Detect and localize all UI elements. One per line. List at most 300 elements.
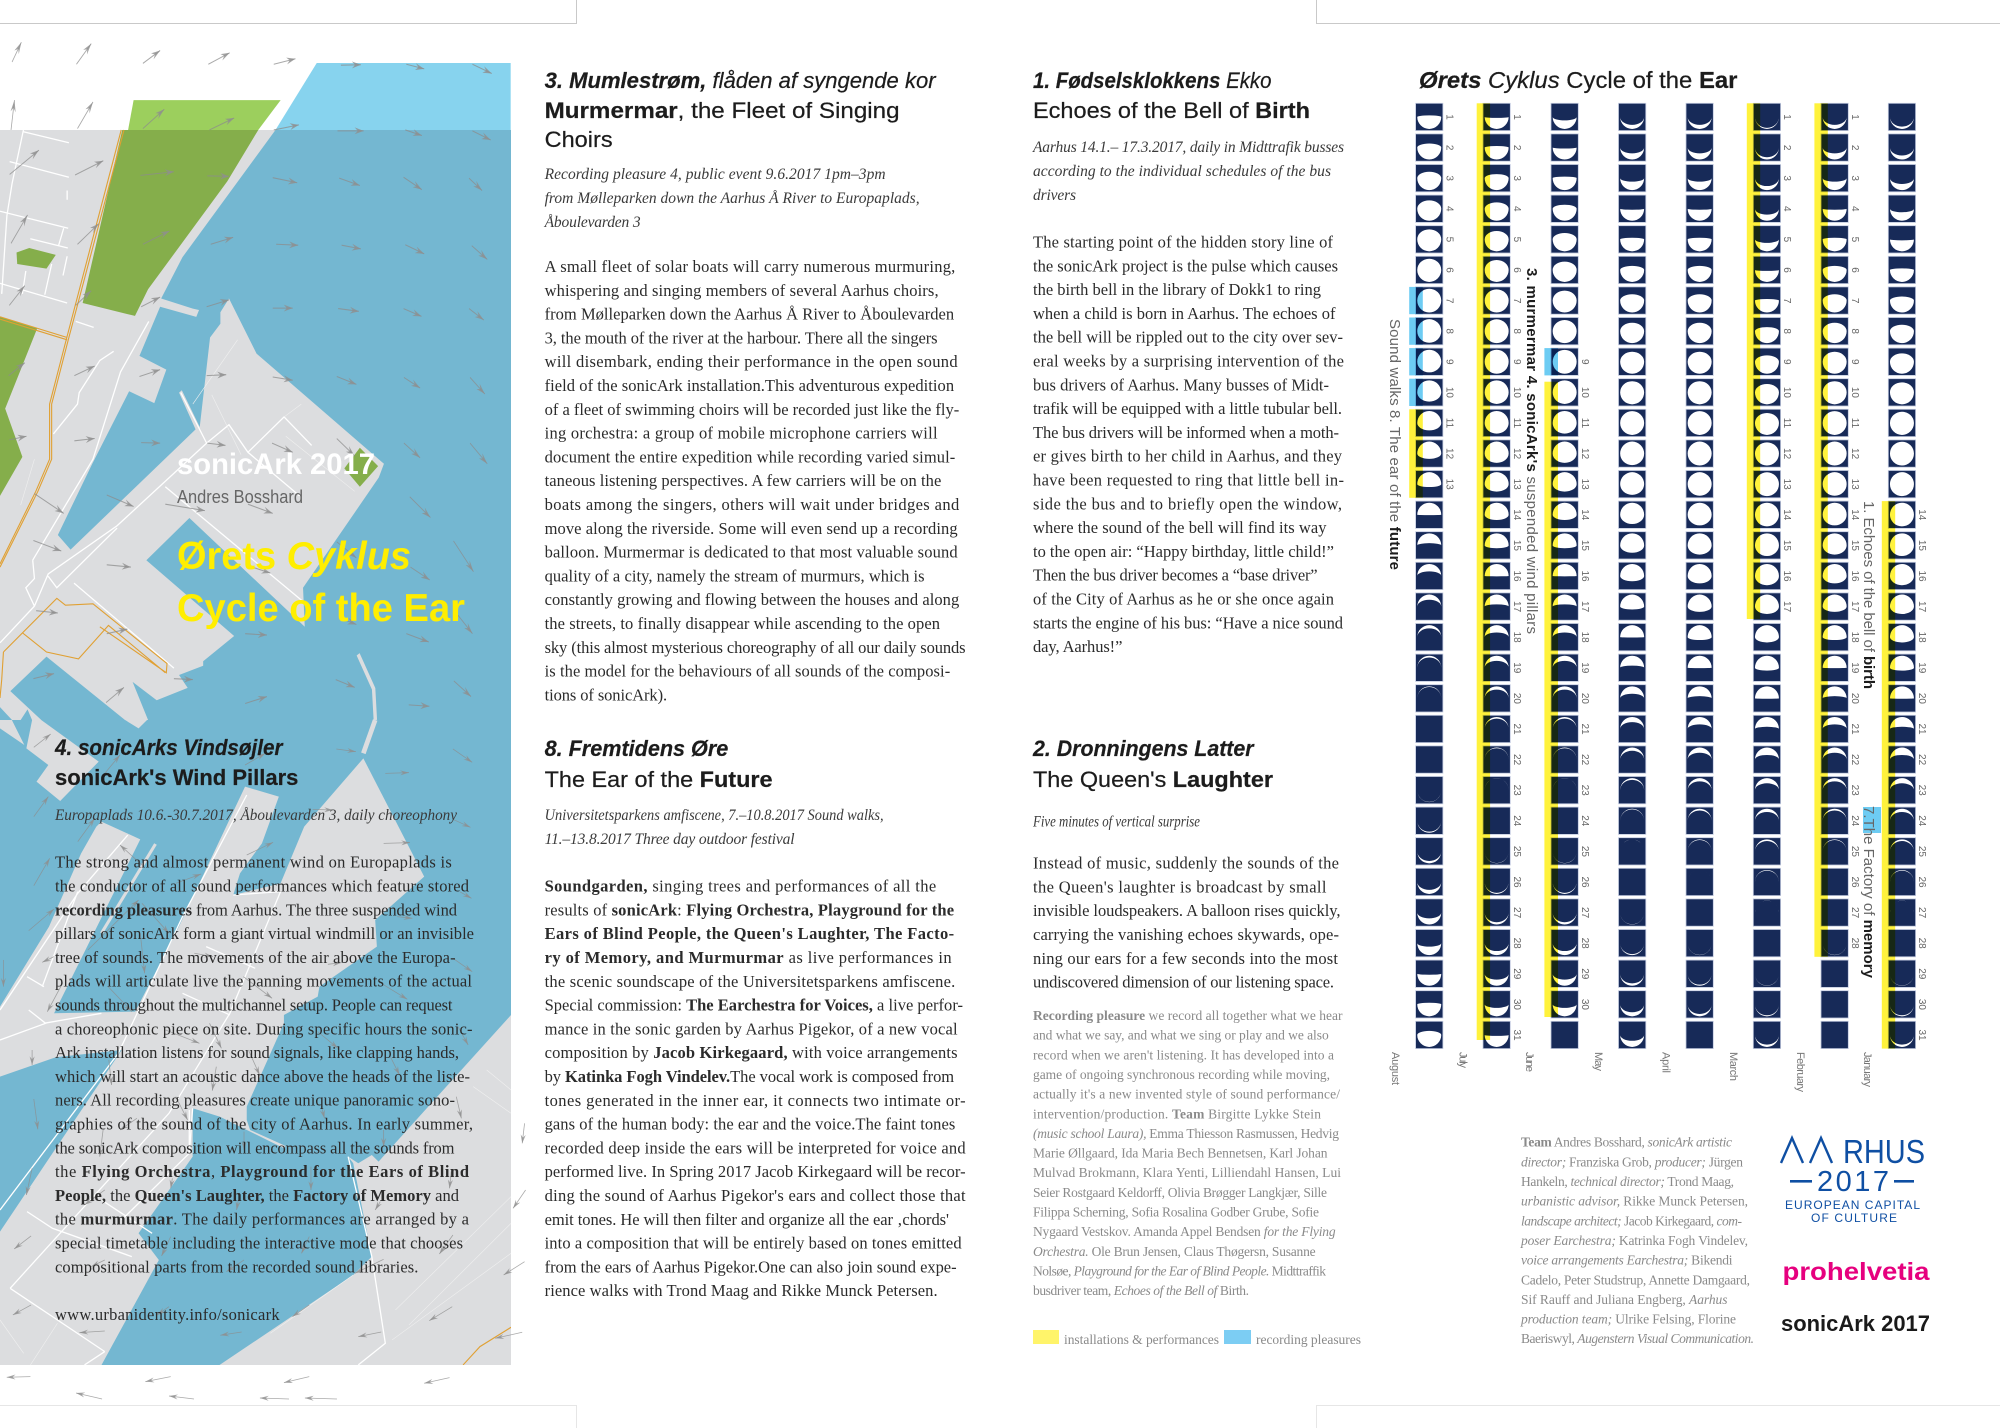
day numbers: January: 19	[1916, 662, 1927, 674]
body text: emit tones. He will then filter and organize all the ear ‚chords'	[545, 1210, 949, 1229]
dates: Recording pleasure 4, public event 9.6.2017 1pm–3pm	[544, 166, 886, 183]
body text: www.urbanidentity.info/sonicark	[55, 1305, 280, 1324]
heading: sonicArk's Wind Pillars	[54, 735, 298, 790]
day numbers: July: 11	[1511, 418, 1522, 429]
body text: ners. All recording pleasures create unique panoramic sono-	[55, 1091, 455, 1110]
day numbers: March	[1781, 114, 1792, 613]
month labels: February	[1794, 1052, 1806, 1092]
day numbers: January: 17	[1916, 601, 1927, 613]
day numbers: July: 6	[1511, 267, 1522, 273]
day numbers: February: 25	[1849, 846, 1860, 857]
dates: Aarhus 14.1.– 17.3.2017, daily in Midttrafik busses	[1032, 139, 1344, 156]
body text: recording pleasures from Aarhus. The three suspended wind	[55, 900, 458, 919]
text block: team credits	[1520, 1135, 1754, 1346]
day numbers: July: 16	[1511, 570, 1522, 582]
day numbers: July: 21	[1511, 723, 1522, 735]
legend label: recording: recording pleasures	[1256, 1332, 1361, 1347]
body text: ning our ears for a few seconds into the most	[1033, 949, 1338, 968]
panel: harbour map	[0, 42, 526, 1399]
day numbers: January: 16	[1916, 570, 1927, 582]
day numbers: July: 4	[1511, 206, 1522, 212]
subtitle: Five minutes of vertical surprise	[1032, 814, 1200, 830]
body text: into a composition that will be entirely based on tones emitted	[545, 1234, 962, 1253]
day numbers: August: 13	[1443, 479, 1454, 490]
text block: team credits: urbanistic advisor, Rikke Munck Petersen,	[1521, 1194, 1748, 1209]
dates	[1032, 139, 1344, 204]
body text: ing orchestra: a group of mobile microphone carriers will	[545, 424, 938, 443]
body text: a choreophonic piece on site. During specific hours the sonic-	[55, 1019, 472, 1038]
day numbers: February: 8	[1849, 328, 1860, 334]
text block: recording pleasure: busdriver team, Echoes of the Bell of Birth.	[1033, 1283, 1249, 1298]
body text: People, the Queen's Laughter, the Factory of Memory and	[55, 1186, 460, 1205]
logo: Aarhus 2017: EUROPEAN CAPITAL	[1785, 1198, 1920, 1212]
text block: recording pleasure: actually it's a new invented style of sound performance/	[1033, 1087, 1340, 1102]
body text: undiscovered dimension of our listening space.	[1033, 973, 1334, 992]
text block: recording pleasure: Filippa Scherning, Sofia Rosalina Godber Grube, Sofie	[1033, 1204, 1319, 1220]
day numbers: February: 14	[1849, 509, 1860, 521]
body text: have been requested to ring that little bell in-	[1033, 470, 1344, 490]
day numbers: February: 12	[1849, 448, 1860, 460]
heading: 8. Fremtidens Øre	[545, 736, 728, 761]
day numbers: February: 24	[1849, 815, 1860, 827]
body text: ry of Memory, and Murmurmar as live performances in	[545, 948, 952, 967]
body text	[545, 877, 966, 1300]
text block: team credits: landscape architect; Jacob Kirkegaard, com-	[1521, 1213, 1742, 1228]
day numbers: February: 4	[1849, 206, 1860, 212]
day numbers: February: 13	[1849, 479, 1860, 490]
panel: section 8 Ear of the Future	[545, 736, 966, 1300]
body text: the Flying Orchestra, Playground for the Ears of Blind	[55, 1162, 469, 1181]
body text: starts the engine of his bus: “Have a nice sound	[1033, 613, 1344, 632]
text block: recording pleasure: Recording pleasure we record all together what we hear	[1033, 1008, 1343, 1023]
day numbers: March: 2	[1781, 145, 1792, 151]
day numbers: February: 2	[1849, 145, 1860, 151]
map: roads	[0, 130, 511, 1365]
body text: rience walks with Trond Maag and Rikke Munck Petersen.	[545, 1281, 938, 1300]
day numbers: February: 7	[1849, 298, 1860, 304]
day numbers: August: 9	[1443, 359, 1454, 365]
body text: Ark installation listens for sound signals, like clapping hands,	[55, 1043, 459, 1062]
legend swatch: yellow	[1033, 1330, 1059, 1344]
body text: day, Aarhus!”	[1033, 637, 1122, 656]
heading: Echoes of the Bell of Birth	[1033, 98, 1310, 123]
body text: from Mølleparken down the Aarhus Å River to Åboulevarden	[545, 305, 954, 324]
body text: Instead of music, suddenly the sounds of the	[1033, 854, 1339, 873]
day numbers: January: 23	[1916, 785, 1927, 796]
day numbers: March: 12	[1781, 448, 1792, 460]
text block: recording pleasure: Nolsøe, Playground for the Ear of Blind People. Midttraffik	[1033, 1263, 1326, 1278]
day numbers: June: 17	[1579, 601, 1590, 613]
dates: drivers	[1033, 187, 1076, 204]
month labels: August	[1389, 1052, 1401, 1085]
day numbers: February: 26	[1849, 876, 1860, 888]
text block: team credits: Team Andres Bosshard, sonicArk artistic	[1521, 1135, 1732, 1150]
main title: Ørets Cyklus: Ørets Cyklus	[177, 535, 411, 578]
day numbers: July: 13	[1511, 479, 1522, 490]
day numbers: March: 14	[1781, 509, 1792, 521]
panel: section 2 The Queen's Laughter	[1032, 736, 1340, 992]
day numbers: August: 11	[1443, 418, 1454, 429]
dates	[544, 166, 920, 231]
day numbers: July: 3	[1511, 175, 1522, 181]
body text: the Queen's laughter is broadcast by small	[1033, 877, 1327, 896]
day numbers: February: 17	[1849, 601, 1860, 613]
heading: The Ear of the Future	[545, 767, 773, 792]
map: wind arrows	[3, 42, 526, 1399]
body text: invisible loudspeakers. A balloon rises quickly,	[1033, 901, 1340, 920]
text block: recording pleasure: Marie Øllgaard, Ida Maria Bech Bennetsen, Karl Johan	[1033, 1146, 1328, 1161]
day numbers: June: 21	[1579, 723, 1590, 735]
day numbers: January: 25	[1916, 846, 1927, 857]
day numbers: June: 27	[1579, 907, 1590, 919]
main title: Cycle of the Ear: Cycle of the Ear	[177, 587, 465, 630]
day numbers: June: 14	[1579, 509, 1590, 521]
chart: moon calendar	[1386, 103, 1927, 1093]
day numbers: July: 18	[1511, 632, 1522, 643]
body text: side the bus and to briefly open the window,	[1033, 494, 1342, 513]
day numbers: February: 18	[1849, 632, 1860, 643]
month labels: March	[1727, 1052, 1739, 1081]
day numbers: July: 12	[1511, 448, 1522, 460]
title: sonicArk 2017: sonicArk 2017	[177, 448, 375, 481]
vertical label: sound walks, ear of the future: Sound walks 8. The ear of the future	[1386, 319, 1403, 570]
body text: graphies of the sound of the city of Aarhus. In early summer,	[55, 1114, 473, 1134]
text block: recording pleasure: Mulvad Brokmann, Klara Yenti, Lilliendahl Hansen, Lui	[1033, 1165, 1341, 1180]
day numbers: July: 10	[1511, 387, 1522, 398]
heading: 1. Fødselsklokkens Ekko	[1033, 68, 1272, 93]
day numbers: July: 8	[1511, 328, 1522, 334]
text block: recording pleasure: Seier Rostgaard Keldorff, Olivia Brøgger Langkjær, Sille	[1033, 1185, 1327, 1200]
body text: er gives birth to her child in Aarhus, and they	[1033, 447, 1343, 466]
day numbers: January: 21	[1916, 723, 1927, 735]
day numbers: February: 6	[1849, 267, 1860, 273]
dates: according to the individual schedules of the bus	[1033, 163, 1331, 180]
day numbers: January: 22	[1916, 754, 1927, 766]
day numbers: January: 31	[1916, 1029, 1927, 1041]
body text: to the open air: “Happy birthday, little child!”	[1033, 542, 1334, 561]
text block: team credits: voice arrangements Earchestra; Bikendi	[1521, 1253, 1733, 1268]
day numbers: January: 30	[1916, 999, 1927, 1010]
day numbers: March: 15	[1781, 540, 1792, 551]
day numbers: July: 31	[1511, 1029, 1522, 1041]
body text: quality of a city, namely the stream of murmurs, which is	[545, 566, 925, 585]
day numbers: February: 11	[1849, 418, 1860, 429]
day numbers: February: 21	[1849, 723, 1860, 735]
body text: compositional parts from the recorded sound libraries.	[55, 1257, 418, 1276]
day numbers: March: 1	[1781, 114, 1792, 120]
body text: sky (this almost mysterious choreography of all our daily sounds	[545, 638, 966, 657]
body text: of the City of Aarhus as he or she once again	[1033, 590, 1334, 608]
day numbers: July: 24	[1511, 815, 1522, 827]
body text: performed live. In Spring 2017 Jacob Kirkegaard will be recor-	[545, 1162, 966, 1181]
day numbers: February: 23	[1849, 785, 1860, 796]
day numbers: March: 9	[1781, 359, 1792, 365]
body text: mance in the sonic garden by Aarhus Pigekor, of a new vocal	[545, 1019, 958, 1038]
day numbers: March: 7	[1781, 298, 1792, 304]
day numbers: February: 19	[1849, 662, 1860, 674]
legend	[1033, 1330, 1361, 1347]
body text: document the entire expedition while recording varied simul-	[545, 447, 955, 466]
legend swatch: blue	[1224, 1330, 1251, 1344]
author: Andres Bosshard	[177, 487, 303, 507]
vertical label: factory of memory: 7.The Factory of memory	[1860, 806, 1877, 979]
body text: the conductor of all sound performances which feature stored	[55, 876, 470, 896]
vertical label: murmermar and wind pillars: 3. murmermar 4. sonicArk's suspended wind pillars	[1523, 268, 1540, 634]
text block: recording pleasure: (music school Laura), Emma Thiesson Rasmussen, Hedvig	[1033, 1126, 1339, 1141]
day numbers: January: 24	[1916, 815, 1927, 827]
logo: Aarhus 2017: RHUS	[1843, 1133, 1925, 1170]
day numbers: February: 5	[1849, 237, 1860, 243]
body text: from the ears of Aarhus Pigekor.One can also join sound expe-	[545, 1257, 957, 1276]
day numbers: March: 10	[1781, 387, 1792, 398]
panel: section 1 Echoes of the Bell of Birth	[1032, 68, 1344, 656]
day numbers: July: 23	[1511, 785, 1522, 796]
body text: when a child is born in Aarhus. The echoes of	[1033, 304, 1336, 323]
body text: where the sound of the bell will find its way	[1033, 518, 1327, 537]
day numbers: June: 22	[1579, 754, 1590, 766]
body text: ding the sound of Aarhus Pigekor's ears and collect those that	[545, 1186, 966, 1205]
day numbers: July: 20	[1511, 693, 1522, 704]
day numbers: July: 7	[1511, 298, 1522, 304]
body text: which will start an acoustic dance above the heads of the liste-	[55, 1067, 470, 1086]
body text: taneous listening perspectives. A few carriers will be on the	[545, 471, 941, 490]
day numbers: March: 16	[1781, 570, 1792, 582]
day numbers: August: 7	[1443, 298, 1454, 304]
section 4 text	[54, 735, 474, 1324]
month labels	[1389, 1052, 1873, 1092]
day numbers: February: 16	[1849, 570, 1860, 582]
body text: 3, the mouth of the river at the harbour. There all the singers	[545, 328, 938, 347]
month labels: June	[1523, 1052, 1535, 1072]
text block: recording pleasure	[1033, 1008, 1343, 1298]
body text: bus drivers of Aarhus. Many busses of Midt-	[1033, 375, 1329, 394]
day numbers: July: 30	[1511, 999, 1522, 1010]
heading: Murmermar , the Fleet of Singing	[545, 98, 900, 123]
day numbers: August: 1	[1443, 114, 1454, 120]
day numbers: June: 15	[1579, 540, 1590, 551]
day numbers: January: 14	[1916, 509, 1927, 521]
body text: pillars of sonicArk form a giant virtual windmill or an invisible	[55, 924, 474, 943]
day numbers: February: 15	[1849, 540, 1860, 551]
day numbers: June: 26	[1579, 876, 1590, 888]
blue highlight bars: recording pleasures	[1409, 287, 1881, 833]
body text: composition by Jacob Kirkegaard, with voice arrangements	[545, 1043, 958, 1062]
day numbers: February	[1849, 114, 1860, 949]
text block: recording pleasure: game of ongoing synchronous recording while moving,	[1033, 1067, 1330, 1082]
logo: Aarhus 2017: OF CULTURE	[1811, 1211, 1897, 1225]
day numbers: August: 5	[1443, 237, 1454, 243]
day numbers: January: 28	[1916, 938, 1927, 949]
body text: Special commission: The Earchestra for Voices, a live perfor-	[545, 996, 963, 1015]
day numbers: July: 9	[1511, 359, 1522, 365]
day numbers: March: 6	[1781, 267, 1792, 273]
dates: from Mølleparken down the Aarhus Å River to Europaplads,	[545, 190, 920, 207]
body text: of a fleet of swimming choirs will be recorded just like the fly-	[545, 400, 959, 419]
body text: special timetable including the interactive mode that chooses	[55, 1234, 463, 1252]
day numbers: July: 17	[1511, 601, 1522, 613]
body text: recorded deep inside the ears will be interpreted for voice and	[545, 1138, 966, 1157]
day numbers: July: 22	[1511, 754, 1522, 766]
body text	[55, 853, 474, 1324]
text block: recording pleasure: record when we aren't listening. It has developed into a	[1033, 1047, 1334, 1062]
day numbers: June: 18	[1579, 632, 1590, 643]
day numbers: July: 2	[1511, 145, 1522, 151]
dates: Åboulevarden 3	[544, 214, 641, 231]
day numbers: March: 5	[1781, 237, 1792, 243]
day numbers: July: 15	[1511, 540, 1522, 551]
body text: A small fleet of solar boats will carry numerous murmuring,	[545, 257, 955, 276]
day numbers: August: 12	[1443, 448, 1454, 460]
yellow highlight bars: installations	[1409, 103, 1895, 1049]
body text: the bell will be rippled out to the city over sev-	[1033, 328, 1343, 347]
column: May	[1618, 103, 1646, 1049]
body text: The strong and almost permanent wind on Europaplads is	[55, 853, 452, 872]
body text: sounds throughout the multichannel setup. People can request	[55, 996, 453, 1014]
vertical label: echoes of the bell of birth: 1. Echoes of the bell of birth	[1860, 501, 1877, 689]
column: July	[1483, 103, 1510, 1049]
day numbers: February: 27	[1849, 907, 1860, 919]
day numbers: August: 2	[1443, 145, 1454, 151]
body text: the sonicArk composition will encompass all the sounds from	[55, 1138, 455, 1157]
day numbers: August: 4	[1443, 206, 1454, 212]
body text: the scenic soundscape of the Universitetsparkens amfiscene.	[545, 972, 955, 991]
day numbers: March: 17	[1781, 601, 1792, 613]
body text	[545, 257, 966, 704]
day numbers: February: 28	[1849, 938, 1860, 949]
body text: move along the riverside. Some will even send up a recording	[545, 519, 958, 538]
day numbers: June	[1579, 359, 1590, 1010]
day numbers: February: 9	[1849, 359, 1860, 365]
body text: results of sonicArk: Flying Orchestra, Playground for the	[545, 900, 954, 919]
map: sea and land	[0, 63, 511, 1368]
day numbers: June: 28	[1579, 938, 1590, 949]
day numbers: June: 10	[1579, 387, 1590, 398]
heading	[1032, 736, 1273, 792]
day numbers: August: 8	[1443, 328, 1454, 334]
body text: the streets, to finally disappear while ascending to the open	[545, 614, 940, 633]
column: August	[1416, 103, 1443, 1049]
body text: tones generated in the inner ear, it connects two intimate or-	[545, 1091, 966, 1110]
day numbers: March: 3	[1781, 175, 1792, 181]
month labels: July	[1456, 1052, 1468, 1068]
body text: plads will articulate live the panning movements of the actual	[55, 972, 472, 991]
day numbers: July: 28	[1511, 938, 1522, 949]
text block: recording pleasure: Nygaard Vestskov. Amanda Appel Bendsen for the Flying	[1033, 1224, 1336, 1239]
dates: Europaplads 10.6.-30.7.2017, Åboulevarden 3, daily choreophony	[54, 807, 457, 824]
body text: Ears of Blind People, the Queen's Laughter, The Facto-	[545, 924, 954, 943]
text block: recording pleasure: Orchestra. Ole Brun Jensen, Claus Thøgersn, Susanne	[1033, 1244, 1316, 1259]
body text: constantly growing and flowing between the houses and along	[545, 590, 959, 609]
column: June	[1551, 103, 1578, 1049]
body text: Then the bus driver becomes a “base driver”	[1033, 566, 1318, 585]
body text: will disembark, ending their performance in the open sound	[545, 352, 958, 371]
heading: sonicArk's Wind Pillars: sonicArk's Wind Pillars	[55, 765, 298, 790]
text block: team credits: poser Earchestra; Katrinka Fogh Vindelev,	[1520, 1233, 1748, 1248]
body text: tions of sonicArk).	[545, 685, 667, 704]
day numbers: July: 14	[1511, 509, 1522, 521]
heading	[545, 736, 773, 792]
day numbers: February: 10	[1849, 387, 1860, 398]
text block: team credits: production team; Ulrike Felsing, Florine	[1520, 1312, 1736, 1327]
day numbers: August: 6	[1443, 267, 1454, 273]
month labels: January	[1861, 1052, 1873, 1088]
body text: whispering and singing members of several Aarhus choirs,	[545, 281, 939, 300]
day numbers: February: 1	[1849, 114, 1860, 120]
day numbers: June: 30	[1579, 999, 1590, 1010]
body text: field of the sonicArk installation.This adventurous expedition	[545, 376, 954, 395]
logo: Aarhus 2017: 2017	[1817, 1166, 1889, 1198]
day numbers: July: 5	[1511, 237, 1522, 243]
day numbers: March: 4	[1781, 206, 1792, 212]
body text: the sonicArk project is the pulse which causes	[1033, 256, 1338, 275]
day numbers: January: 27	[1916, 907, 1927, 919]
body text: The bus drivers will be informed when a moth-	[1033, 423, 1339, 442]
heading	[545, 68, 937, 152]
dates	[545, 807, 884, 848]
day numbers: February: 22	[1849, 754, 1860, 766]
day numbers: March: 8	[1781, 328, 1792, 334]
day numbers: June: 29	[1579, 968, 1590, 980]
dates: 11.–13.8.2017 Three day outdoor festival	[545, 831, 795, 848]
day numbers: August: 3	[1443, 175, 1454, 181]
day numbers: June: 9	[1579, 359, 1590, 365]
column: March	[1753, 103, 1781, 1049]
day numbers: July: 29	[1511, 968, 1522, 980]
body text: gans of the human body: the ear and the voice.The faint tones	[545, 1115, 955, 1134]
text block: team credits: Hankeln, technical director; Trond Maag,	[1521, 1174, 1734, 1189]
heading: Choirs	[545, 127, 613, 152]
day numbers: January: 20	[1916, 693, 1927, 704]
day numbers: July: 25	[1511, 846, 1522, 857]
text block: team credits: Sif Rauff and Juliana Engberg, Aarhus	[1521, 1292, 1728, 1307]
text block: team credits: Cadelo, Peter Studstrup, Annette Damgaard,	[1521, 1272, 1750, 1287]
day numbers: February: 3	[1849, 175, 1860, 181]
body text: by Katinka Fogh Vindelev.The vocal work is composed from	[545, 1067, 954, 1086]
panel: section 3 Murmermar	[544, 68, 966, 704]
heading: The Queen's Laughter	[1033, 767, 1273, 792]
month labels: April	[1660, 1052, 1672, 1073]
heading: sonicArk's Wind Pillars: 4. sonicArks Vindsøjler	[54, 735, 284, 760]
day numbers: June: 13	[1579, 479, 1590, 490]
logo: Aarhus 2017	[1781, 1133, 1925, 1225]
dates: Universitetsparkens amfiscene, 7.–10.8.2017 Sound walks,	[545, 807, 884, 824]
month labels: May	[1592, 1052, 1604, 1072]
body text: The starting point of the hidden story line of	[1033, 232, 1334, 252]
body text: balloon. Murmermar is dedicated to that most valuable sound	[545, 543, 958, 562]
day numbers: January	[1916, 509, 1927, 1041]
body text: tree of sounds. The movements of the air above the Europa-	[55, 948, 456, 967]
day numbers: June: 25	[1579, 846, 1590, 857]
day numbers: January: 26	[1916, 876, 1927, 888]
column: April	[1686, 103, 1713, 1049]
heading	[1033, 68, 1310, 123]
heading: 3. Mumlestrøm, flåden af syngende kor	[545, 68, 937, 93]
body text: is the model for the behaviours of all sounds of the composi-	[545, 662, 950, 681]
legend label: installations: installations & performances	[1064, 1332, 1219, 1347]
text block: team credits: director; Franziska Grob, producer; Jürgen	[1521, 1154, 1743, 1169]
body text: the murmurmar. The daily performances are arranged by a	[55, 1210, 470, 1229]
body text: carrying the vanishing echoes skywards, ope-	[1033, 925, 1339, 944]
day numbers: June: 12	[1579, 448, 1590, 460]
day numbers: July	[1511, 114, 1522, 1041]
day numbers: January: 18	[1916, 632, 1927, 643]
day numbers: February: 20	[1849, 693, 1860, 704]
day numbers: July: 1	[1511, 114, 1522, 120]
body text	[1033, 232, 1344, 656]
text block: team credits: Baeriswyl, Augenstern Visual Communication.	[1521, 1331, 1754, 1346]
body text: the birth bell in the library of Dokk1 to ring	[1033, 280, 1321, 299]
heading: 2. Dronningens Latter	[1032, 736, 1255, 761]
